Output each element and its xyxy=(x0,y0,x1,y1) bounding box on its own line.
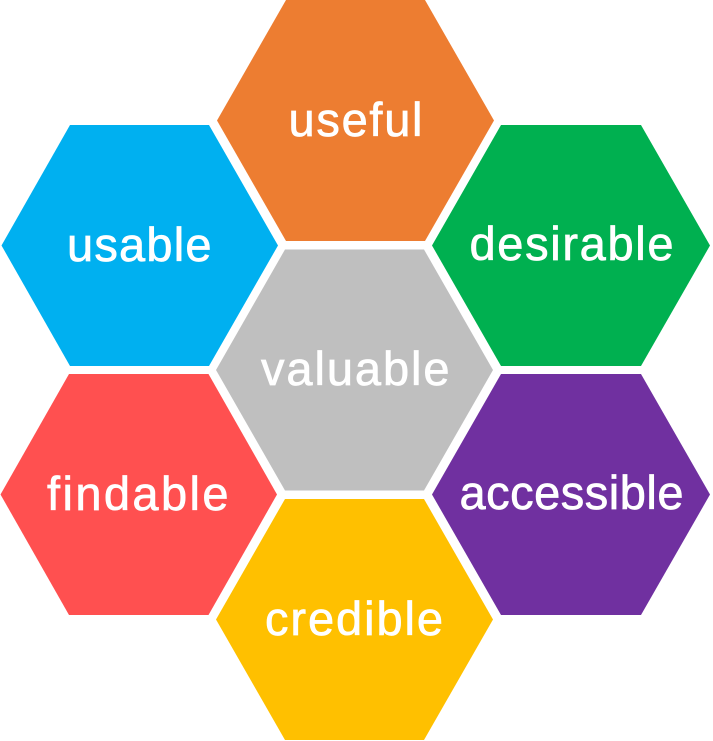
hexagon: desirable xyxy=(432,125,710,366)
hexagon: valuable: valuable xyxy=(261,342,450,395)
hexagon: usable: usable xyxy=(67,218,212,271)
hexagon: accessible xyxy=(432,374,710,615)
hexagon: findable: findable xyxy=(47,467,228,520)
hexagon: valuable xyxy=(216,250,493,490)
hexagon: useful xyxy=(217,0,494,241)
hexagon: useful: useful xyxy=(288,93,422,146)
hexagon: credible xyxy=(216,499,493,740)
hexagon: desirable: desirable xyxy=(470,217,674,270)
hexagon: usable xyxy=(2,125,278,366)
hexagon: findable xyxy=(0,374,277,615)
hexagon: accessible: accessible xyxy=(460,466,684,519)
hexagon: credible: credible xyxy=(265,592,443,645)
